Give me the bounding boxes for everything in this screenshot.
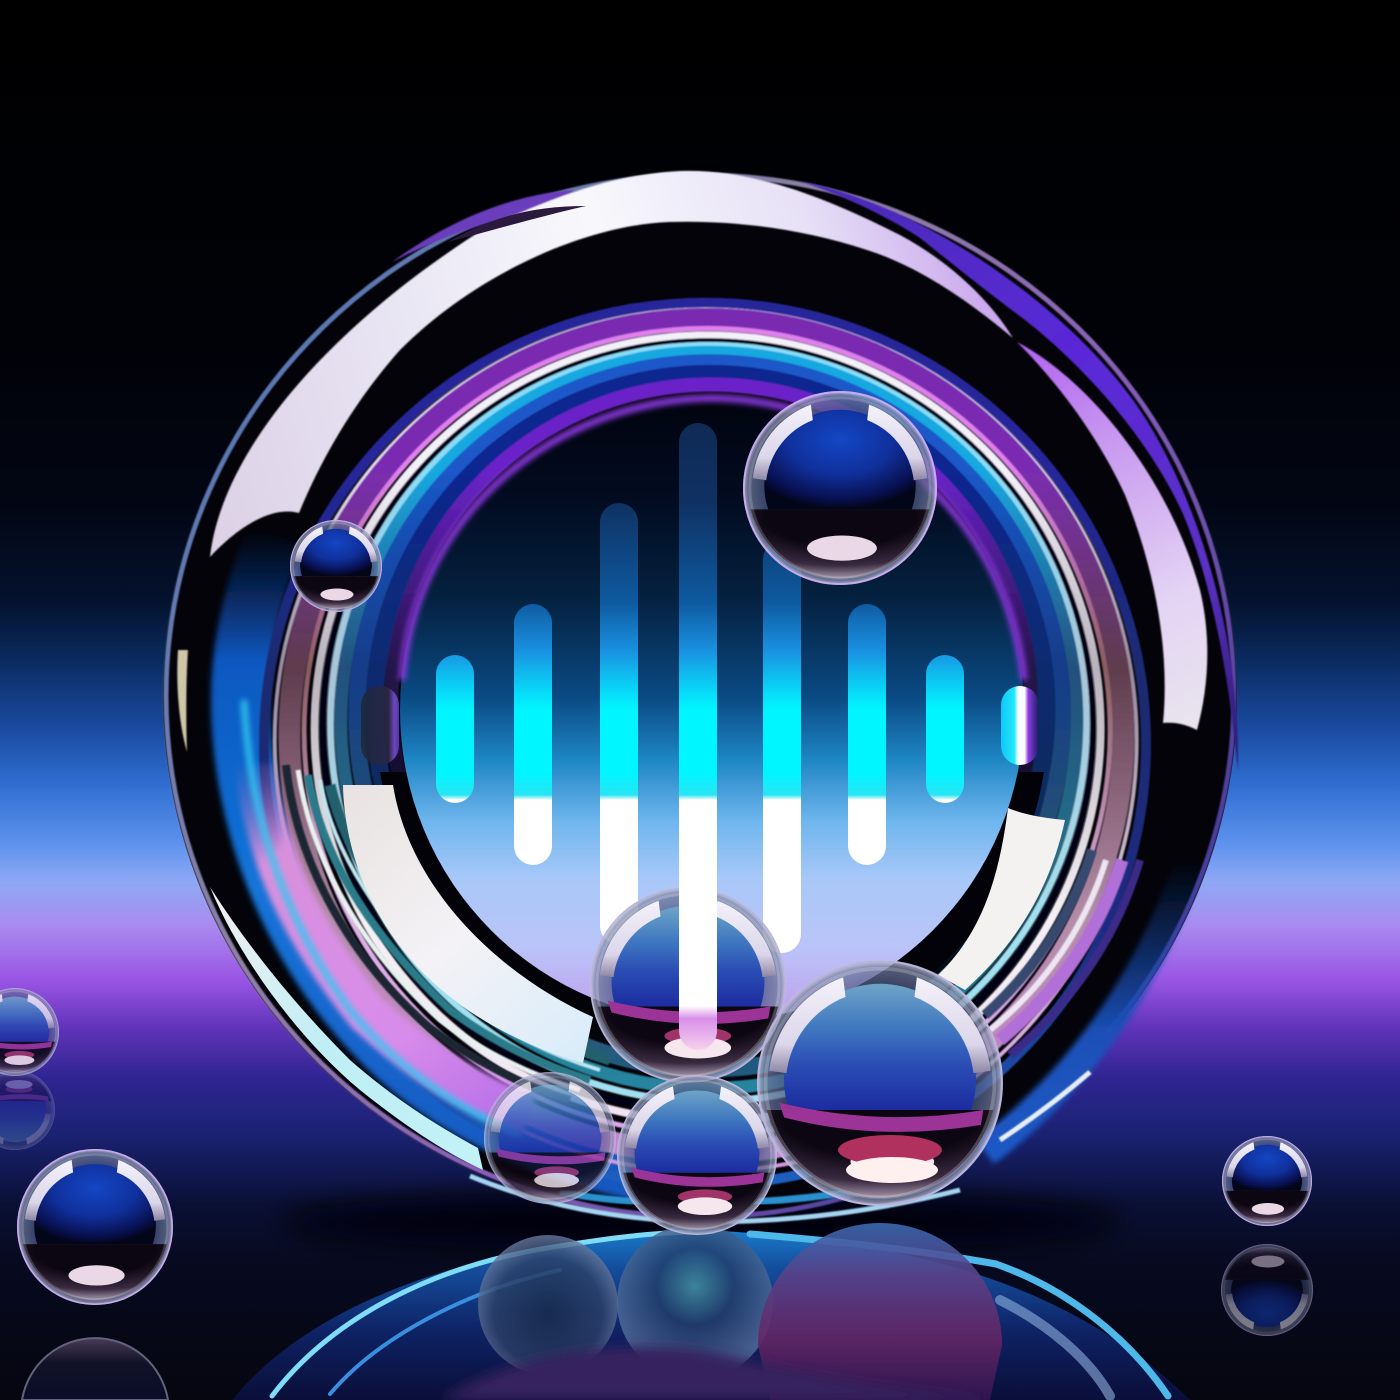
bar 4	[600, 503, 638, 945]
pink band lower left	[255, 765, 530, 1114]
red reflection in largest sphere	[838, 1135, 942, 1165]
bar 7	[848, 604, 886, 865]
white highlight band top	[210, 171, 1013, 557]
inner rainbow stripes	[264, 303, 1146, 1185]
lower right blue band	[985, 860, 1190, 1152]
bar 1 dim	[361, 686, 399, 765]
glass stripes lower right	[985, 850, 1140, 1055]
loose spheres on the floor	[0, 988, 1313, 1400]
ring body	[163, 172, 1237, 1220]
white lower right arc	[938, 808, 1065, 990]
glass stripes lower left	[286, 765, 610, 1100]
floor and reflection	[232, 1192, 1190, 1400]
reflected large sphere	[758, 1223, 1002, 1400]
bar 9	[1001, 686, 1039, 765]
purple band upper right	[800, 181, 1238, 770]
reflected ring highlights	[272, 1232, 1168, 1396]
small sphere on ring left	[290, 520, 382, 612]
bottom purple glow	[440, 1347, 1000, 1400]
sphere left	[17, 1149, 173, 1305]
bar 8	[926, 655, 964, 803]
violet edge of window	[402, 398, 1024, 680]
sphere right reflection	[1221, 1244, 1313, 1336]
sphere far left	[0, 988, 59, 1076]
outer left streak	[177, 650, 188, 752]
cluster of spheres	[484, 960, 1003, 1235]
audio waveform bars	[361, 503, 1039, 953]
rim	[166, 175, 1234, 1217]
window of the ring	[400, 398, 1024, 1022]
bar 6	[763, 540, 801, 953]
sphere behind central bar	[590, 887, 786, 1083]
lower right highlight	[1000, 1072, 1090, 1140]
floor shadow	[280, 1192, 1120, 1252]
black rim of window, lower half	[380, 772, 1044, 1056]
middle cluster sphere	[617, 1075, 777, 1235]
sphere left reflection	[22, 1338, 168, 1400]
lower outer blue band	[240, 535, 720, 1182]
sphere far left reflection	[0, 1070, 55, 1150]
sphere right	[1222, 1136, 1312, 1226]
lilac highlight right	[1017, 342, 1207, 730]
bar 2	[436, 655, 474, 803]
central bar	[679, 423, 717, 1050]
reflected ring	[232, 1230, 1190, 1400]
reflected middle sphere	[617, 1224, 773, 1380]
glass ring	[163, 171, 1238, 1222]
white lower left arc	[343, 785, 593, 1063]
dark streak in highlight	[448, 206, 586, 242]
large sphere upper right	[743, 391, 937, 585]
white reflection in largest sphere	[846, 1157, 938, 1183]
reflected small sphere	[478, 1235, 618, 1375]
cyan stripe lower left	[244, 700, 520, 1135]
bar 3	[514, 604, 552, 865]
small cluster sphere	[484, 1072, 616, 1204]
largest sphere	[757, 960, 1003, 1206]
purple streak upper left	[392, 190, 573, 262]
bottom glass lines	[470, 1176, 960, 1222]
lower rim stripe	[210, 887, 483, 1170]
